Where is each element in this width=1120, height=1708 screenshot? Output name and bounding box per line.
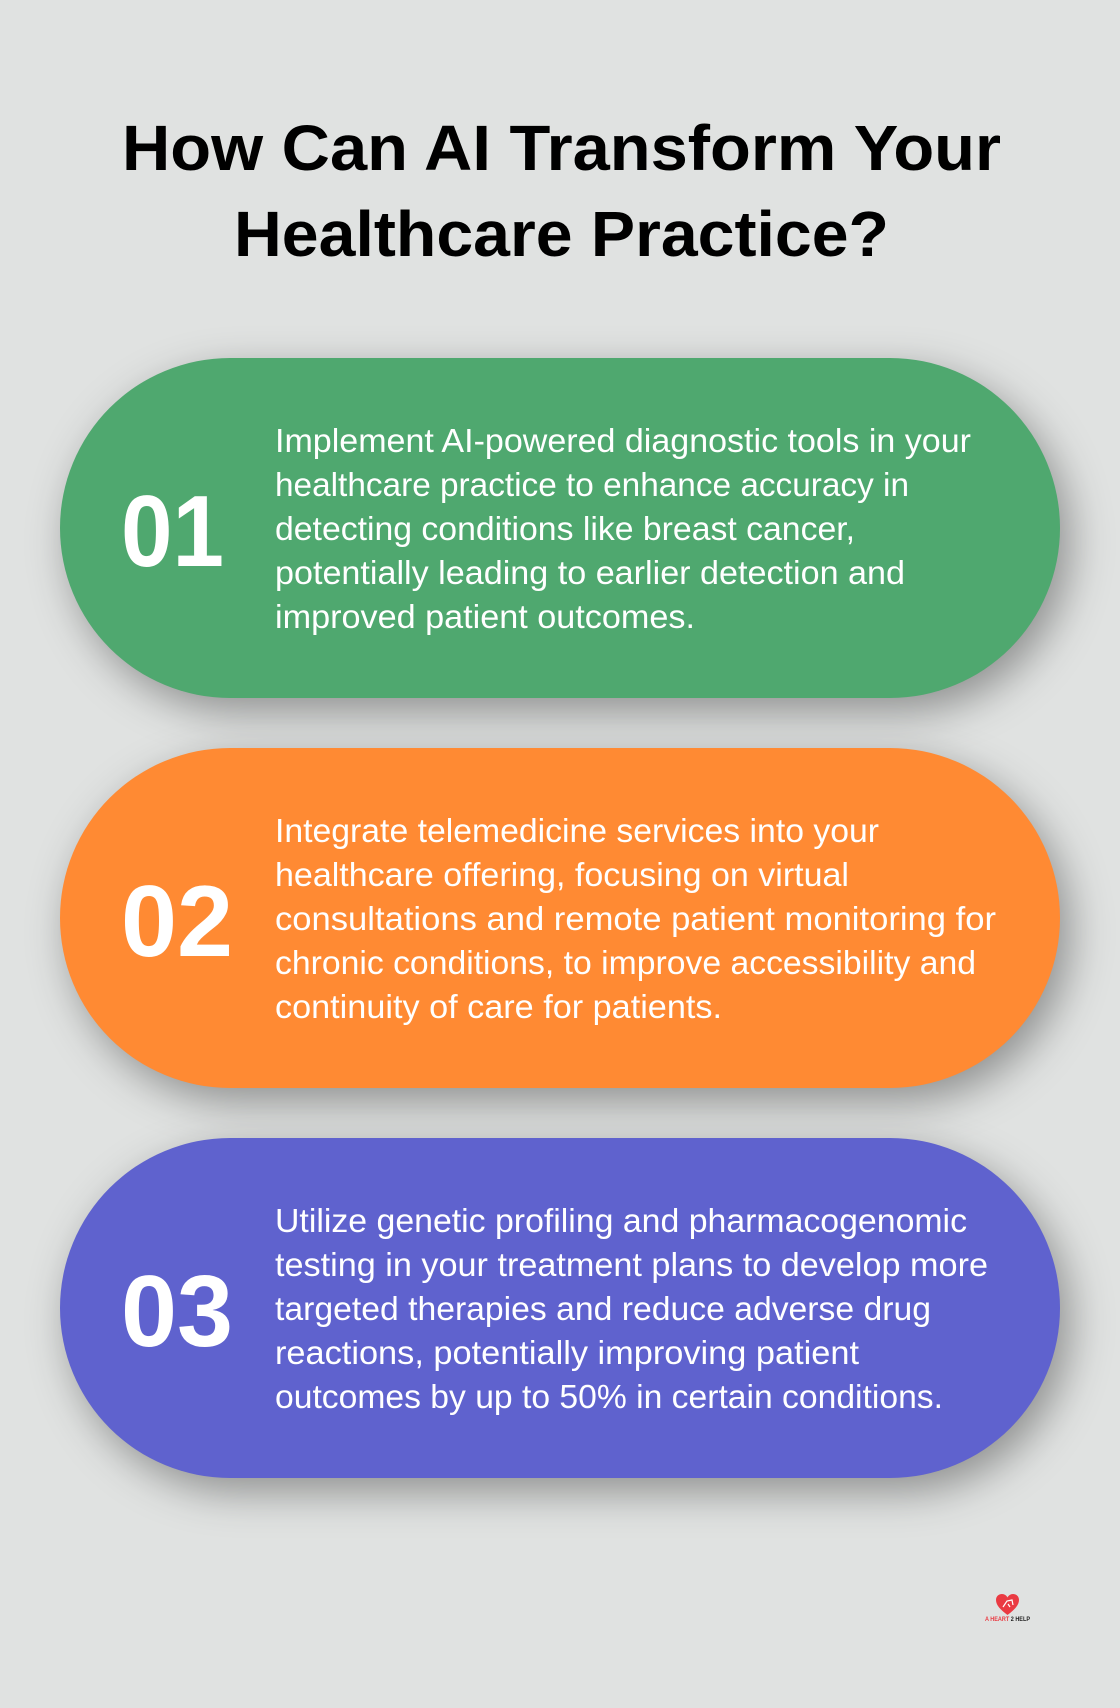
text block: step 01 description: potentially leading to earlier detection and	[275, 554, 905, 591]
number 02: 02	[121, 866, 233, 978]
text block: step 01 description: improved patient outcomes.	[275, 598, 695, 635]
text block: step 01 description: detecting conditions like breast cancer,	[275, 510, 855, 547]
text block: step 03 description: reactions, potentially improving patient	[275, 1334, 859, 1371]
text block: step 02 description: consultations and remote patient monitoring for	[275, 900, 996, 937]
number 01: 01	[121, 476, 224, 588]
text block: step 02 description: chronic conditions, to improve accessibility and	[275, 944, 976, 981]
panel: step 03	[60, 1138, 1070, 1492]
text block: step 02 description: healthcare offering, focusing on virtual	[275, 856, 849, 893]
panel: step 01	[60, 358, 1070, 712]
logo: A Heart 2 Help	[985, 1594, 1031, 1623]
title: Healthcare Practice?	[234, 198, 889, 270]
text block: step 03 description: testing in your treatment plans to develop more	[275, 1246, 988, 1283]
title: How Can AI Transform Your	[122, 112, 1001, 184]
text block: step 03 description: outcomes by up to 50% in certain conditions.	[275, 1378, 943, 1415]
text block: step 01 description: Implement AI-powered diagnostic tools in your	[275, 422, 971, 459]
text block: step 02 description: continuity of care for patients.	[275, 988, 722, 1025]
text block: step 03 description	[275, 1202, 988, 1415]
text block: step 02 description: Integrate telemedicine services into your	[275, 812, 879, 849]
panel: step 02	[60, 748, 1070, 1102]
text block: step 01 description: healthcare practice to enhance accuracy in	[275, 466, 909, 503]
text block: step 03 description: Utilize genetic profiling and pharmacogenomic	[275, 1202, 967, 1239]
icon: heart with hands	[996, 1594, 1019, 1615]
title	[122, 112, 1001, 270]
text block: step 03 description: targeted therapies and reduce adverse drug	[275, 1290, 931, 1327]
number 03: 03	[121, 1256, 233, 1368]
text block: step 02 description	[275, 812, 996, 1025]
logo wordmark: A HEART 2 HELP	[985, 1616, 1031, 1623]
text block: step 01 description	[275, 422, 971, 635]
